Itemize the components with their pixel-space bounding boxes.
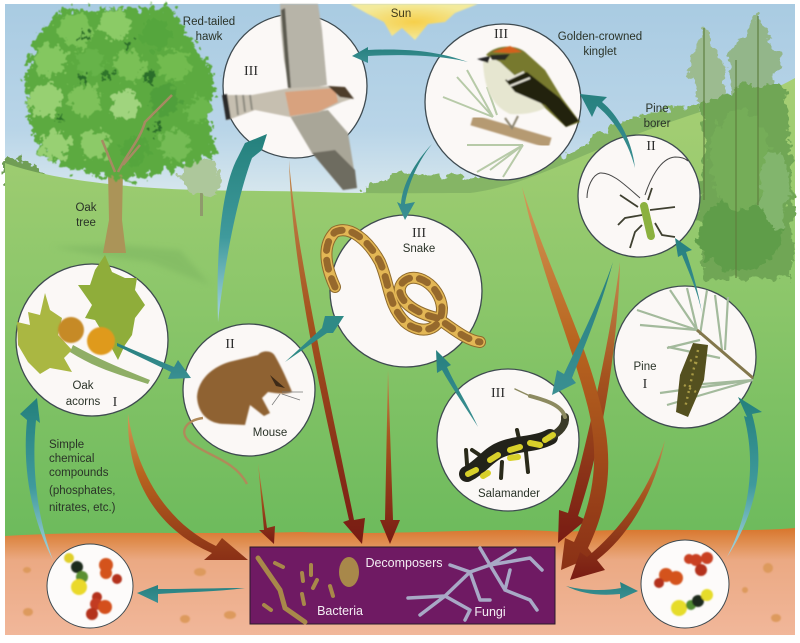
- panel: snake circle: [326, 215, 482, 367]
- arrow: borer to salamander: [552, 262, 613, 395]
- salamander label: Salamander: [478, 488, 540, 500]
- label: golden-crowned kinglet: kinglet: [583, 46, 617, 58]
- icon: bacteria: [258, 557, 359, 622]
- snake label: Snake: [403, 243, 435, 255]
- panel: oak acorns circle: acorns: [66, 396, 101, 408]
- icon: kinglet: [477, 46, 580, 128]
- trophic level: III: [412, 226, 426, 241]
- mouse label: Mouse: [253, 427, 287, 439]
- arrow: mouse to hawk: [218, 134, 267, 322]
- pine label: Pine: [633, 361, 657, 373]
- tree ground shadow: [52, 245, 210, 285]
- arrow: salamander to decomposers: [558, 262, 620, 543]
- trophic level: III: [244, 64, 258, 79]
- panel: salamander circle: [437, 369, 579, 511]
- arrow: acorns to mouse: [117, 343, 191, 379]
- canopy: [25, 8, 216, 180]
- label: pine borer: [644, 103, 671, 130]
- branches: [102, 95, 172, 172]
- oak tree: [25, 8, 216, 285]
- icon: salamander: [466, 389, 565, 478]
- panel: left chemical compounds circle: [47, 544, 133, 628]
- icon: mouse: [184, 351, 303, 484]
- icon: pine needles and branch: [443, 70, 550, 177]
- label: simple chemical compounds: [49, 439, 116, 514]
- background sky: [5, 4, 795, 199]
- label: red-tailed hawk: [183, 16, 235, 43]
- arrow: kinglet to snake: [397, 144, 432, 220]
- panel: decomposers box: [250, 547, 555, 624]
- small distant tree: [180, 158, 222, 216]
- arrow: mouse to decomposers: [258, 463, 275, 544]
- panel: pine circle: [614, 286, 756, 428]
- label: red-tailed hawk: Red-tailed: [183, 16, 235, 28]
- label: simple chemical compounds: nitrates, etc.): [49, 502, 116, 514]
- label: simple chemical compounds: chemical: [49, 453, 94, 465]
- pine trees background: [688, 14, 793, 280]
- arrow: pine to borer: [675, 238, 702, 313]
- icon: hawk: [222, 4, 357, 190]
- icon: pine borer beetle: [587, 157, 688, 248]
- arrow: borer to kinglet: [580, 94, 635, 168]
- panel: oak acorns circle: [16, 255, 168, 416]
- trophic level: II: [646, 139, 656, 154]
- panel: kinglet circle: [425, 24, 581, 180]
- arrow: decomposers to right compounds: [566, 582, 638, 599]
- trophic level: III: [491, 386, 505, 401]
- label: red-tailed hawk: hawk: [196, 31, 223, 43]
- oak acorns label: Oak: [72, 380, 94, 392]
- label: golden-crowned kinglet: Golden-crowned: [558, 31, 642, 43]
- trophic level: I: [113, 395, 118, 410]
- label: golden-crowned kinglet: [558, 31, 642, 58]
- trophic level: II: [225, 337, 235, 352]
- panel: hawk circle: [222, 4, 367, 190]
- arrows: energy flow to decomposers: [128, 160, 665, 580]
- label: pine borer: Pine: [645, 103, 669, 115]
- arrow: kinglet to hawk: [352, 47, 468, 63]
- arrow: oak to decomposers: [128, 414, 248, 560]
- arrow: mouse to snake: [285, 316, 344, 362]
- label: simple chemical compounds: compounds: [49, 467, 109, 479]
- arrow: kinglet to decomposers: [522, 187, 608, 570]
- icon: fungi: [408, 548, 542, 620]
- label: simple chemical compounds: (phosphates,: [49, 485, 116, 497]
- grass field: [5, 78, 795, 545]
- label: simple chemical compounds: Simple: [49, 439, 84, 451]
- soil speckles: [23, 563, 781, 623]
- icon: molecules: [654, 552, 713, 616]
- label: oak tree: Oak: [75, 202, 97, 214]
- decomposers label: Decomposers: [365, 556, 443, 570]
- arrow: salamander to snake: [436, 350, 478, 427]
- trophic level: III: [494, 27, 508, 42]
- arrow: hawk to decomposers: [289, 160, 365, 544]
- arrow: snake to decomposers: [380, 370, 400, 544]
- panel: mouse circle: [183, 324, 315, 484]
- arrow: decomposers to left compounds: [137, 585, 245, 603]
- icon: molecules: [64, 553, 122, 620]
- arrow: left compounds to oak: [20, 398, 53, 560]
- panel: pine borer circle: [578, 135, 700, 257]
- icon: pine needles and cone: [637, 288, 753, 417]
- trophic level: I: [643, 377, 648, 392]
- panel: right chemical compounds circle: [641, 540, 729, 628]
- arrow: pine to decomposers: [570, 440, 665, 580]
- arrow: right compounds to pine: [727, 397, 762, 557]
- sun label: Sun: [391, 8, 411, 20]
- icon: oak leaves and acorns: [17, 255, 150, 384]
- trunk: [103, 170, 126, 253]
- icon: sun: [350, 4, 478, 40]
- label: oak tree: tree: [76, 217, 96, 229]
- label: pine borer: borer: [644, 118, 671, 130]
- bacteria label: Bacteria: [317, 604, 363, 618]
- distant bushes: [5, 105, 700, 200]
- soil layer: [5, 528, 795, 635]
- icon: snake: [326, 230, 480, 342]
- label: oak tree: [75, 202, 97, 229]
- fungi label: Fungi: [474, 605, 506, 619]
